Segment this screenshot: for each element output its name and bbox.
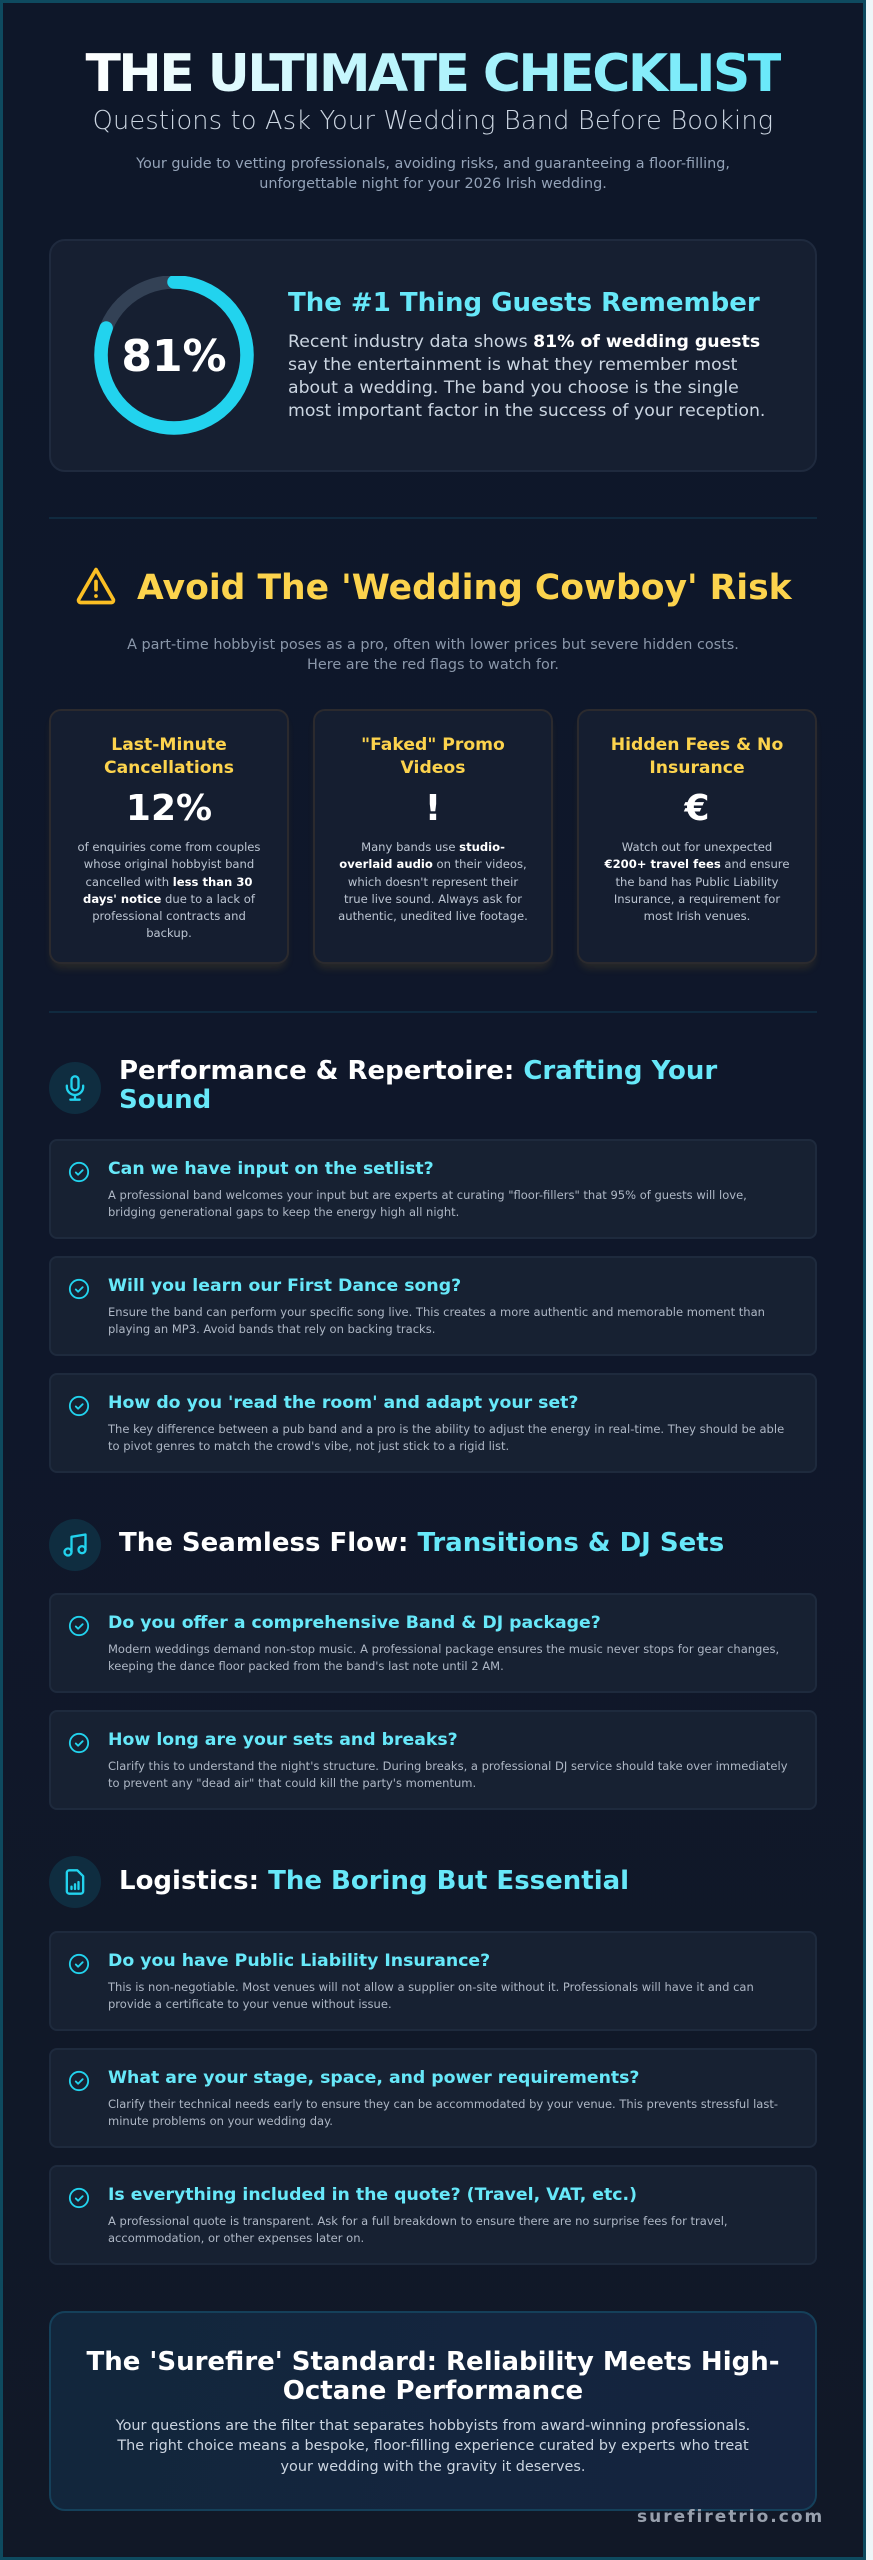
question card: What are your stage, space, and power requirements?	[108, 2068, 639, 2088]
closing heading	[86, 2347, 780, 2406]
hero body text	[288, 332, 765, 420]
intro text	[136, 156, 730, 192]
question card: keeping the dance floor packed from the band's last note until 2 AM.	[108, 1659, 504, 1673]
closing text: Your questions are the filter that separates hobbyists from award-winning professionals.	[116, 2418, 750, 2434]
panel: last-minute cancellations: backup.	[146, 926, 192, 940]
panel: cowboy risk heading	[76, 568, 792, 608]
question card	[49, 1593, 817, 1693]
panel: faked promo videos: Many bands use studio-	[361, 840, 505, 854]
icon: warning triangle	[76, 568, 116, 604]
panel: last-minute cancellations: cancelled with less than 30	[86, 875, 252, 889]
intro text: unforgettable night for your 2026 Irish wedding.	[259, 176, 607, 192]
question card	[49, 1256, 817, 1356]
intro text: Your guide to vetting professionals, avoiding risks, and guaranteeing a floor-filling,	[136, 156, 730, 172]
question card	[49, 1373, 817, 1473]
question card	[49, 1710, 817, 1810]
panel: hidden fees: the band has Public Liability	[616, 875, 778, 889]
risk intro text: A part-time hobbyist poses as a pro, often with lower prices but severe hidden costs.	[127, 637, 739, 653]
panel: closing statement	[49, 2311, 817, 2511]
hero body text: Recent industry data shows 81% of wedding guests	[288, 332, 760, 352]
question card: A professional quote is transparent. Ask for a full breakdown to ensure there are no surprise fees for travel,	[108, 2214, 728, 2228]
question card: Ensure the band can perform your specific song live. This creates a more authentic and memorable moment than	[108, 1305, 765, 1319]
section heading: logistics	[49, 1856, 629, 1908]
heading text	[119, 1056, 718, 1115]
panel: hidden fees	[577, 709, 817, 964]
chart: 81% ring: 81%	[121, 331, 227, 382]
question card: A professional band welcomes your input but are experts at curating "floor-fillers" that 95% of guests will love,	[108, 1188, 747, 1202]
panel: faked promo videos: authentic, unedited live footage.	[338, 909, 528, 923]
panel: hidden fees: €200+ travel fees and ensure	[605, 857, 789, 871]
question card	[49, 1931, 817, 2031]
question card: to pivot genres to match the crowd's vibe, not just stick to a rigid list.	[108, 1439, 509, 1453]
question card: Is everything included in the quote? (Travel, VAT, etc.)	[108, 2185, 637, 2205]
question card: accommodation, or other expenses later on.	[108, 2231, 364, 2245]
section heading: performance	[49, 1056, 718, 1115]
panel: last-minute cancellations: whose original hobbyist band	[84, 857, 254, 871]
heading text: Performance & Repertoire: Crafting Your	[119, 1056, 717, 1086]
risk heading: Avoid The 'Wedding Cowboy' Risk	[137, 568, 792, 608]
icon: document with bars	[49, 1856, 101, 1908]
panel: hero stat	[49, 239, 817, 472]
closing heading: Octane Performance	[283, 2376, 583, 2406]
question card: provide a certificate to your venue without issue.	[108, 1997, 392, 2011]
panel: faked promo videos: overlaid audio on their videos,	[339, 857, 527, 871]
question card: Clarify their technical needs early to ensure they can be accommodated by your venue. This prevents stressful last-	[108, 2097, 778, 2111]
question card: The key difference between a pub band and a pro is the ability to adjust the energy in real-time. They should be able	[108, 1422, 784, 1436]
chart: 81% ring	[94, 276, 254, 435]
question card: Do you have Public Liability Insurance?	[108, 1951, 490, 1971]
subtitle: Questions to Ask Your Wedding Band Before Booking	[93, 106, 773, 136]
closing heading: The 'Surefire' Standard: Reliability Meets High-	[86, 2347, 780, 2377]
question card: Can we have input on the setlist?	[108, 1159, 434, 1179]
question card	[49, 2165, 817, 2265]
section heading: seamless flow	[49, 1519, 724, 1571]
heading text: The Seamless Flow: Transitions & DJ Sets	[119, 1528, 724, 1558]
panel: faked promo videos: true live sound. Always ask for	[344, 892, 522, 906]
panel: faked promo videos: "Faked" Promo	[361, 735, 505, 755]
question card: Clarify this to understand the night's structure. During breaks, a professional DJ service should take over immediately	[108, 1759, 788, 1773]
question card: bridging generational gaps to keep the energy high all night.	[108, 1205, 459, 1219]
closing text	[116, 2418, 750, 2475]
panel: faked promo videos	[313, 709, 553, 964]
hero body text: say the entertainment is what they remember most	[288, 354, 737, 374]
heading text: Sound	[119, 1085, 211, 1115]
panel: hidden fees: Hidden Fees & No	[611, 735, 783, 755]
panel: faked promo videos: !	[425, 788, 441, 829]
panel: hidden fees: Insurance	[649, 758, 745, 778]
panel: hidden fees: most Irish venues.	[644, 909, 750, 923]
risk intro text	[127, 637, 739, 673]
panel: last-minute cancellations	[49, 709, 289, 964]
question card: This is non-negotiable. Most venues will not allow a supplier on-site without it. Professionals will have it and can	[108, 1980, 754, 1994]
hero body text: about a wedding. The band you choose is the single	[288, 378, 739, 398]
question card: Will you learn our First Dance song?	[108, 1276, 461, 1296]
closing text: your wedding with the gravity it deserves.	[280, 2459, 585, 2475]
icon: microphone	[49, 1062, 101, 1114]
question card: minute problems on your wedding day.	[108, 2114, 333, 2128]
heading text: Logistics: The Boring But Essential	[119, 1866, 629, 1896]
panel: faked promo videos: Videos	[401, 758, 465, 778]
risk intro text: Here are the red flags to watch for.	[307, 657, 559, 673]
watermark: surefiretrio.com	[637, 2507, 824, 2527]
panel: faked promo videos: which doesn't represent their	[348, 875, 518, 889]
question card: Do you offer a comprehensive Band & DJ package?	[108, 1613, 601, 1633]
panel: last-minute cancellations: Last-Minute	[111, 735, 227, 755]
panel: hidden fees: Watch out for unexpected	[622, 840, 772, 854]
question card: Modern weddings demand non-stop music. A professional package ensures the music never stops for gear changes,	[108, 1642, 779, 1656]
question card	[49, 1139, 817, 1239]
question card: playing an MP3. Avoid bands that rely on backing tracks.	[108, 1322, 435, 1336]
question card: How long are your sets and breaks?	[108, 1730, 458, 1750]
panel: last-minute cancellations: of enquiries come from couples	[78, 840, 260, 854]
hero heading: The #1 Thing Guests Remember	[288, 288, 760, 318]
closing text: The right choice means a bespoke, floor-filling experience curated by experts who treat	[117, 2438, 749, 2454]
panel: last-minute cancellations: 12%	[126, 788, 212, 829]
panel: last-minute cancellations: professional contracts and	[92, 909, 246, 923]
question card: to prevent any "dead air" that could kill the party's momentum.	[108, 1776, 476, 1790]
hero body text: most important factor in the success of your reception.	[288, 400, 765, 420]
panel: hidden fees: Insurance, a requirement for	[614, 892, 780, 906]
panel: last-minute cancellations: days' notice due to a lack of	[83, 892, 255, 906]
title: THE ULTIMATE CHECKLIST	[85, 44, 781, 104]
icon: music note	[49, 1519, 101, 1571]
panel: last-minute cancellations: Cancellations	[104, 758, 234, 778]
question card: How do you 'read the room' and adapt your set?	[108, 1393, 578, 1413]
question card	[49, 2048, 817, 2148]
panel: hidden fees: €	[684, 788, 710, 829]
